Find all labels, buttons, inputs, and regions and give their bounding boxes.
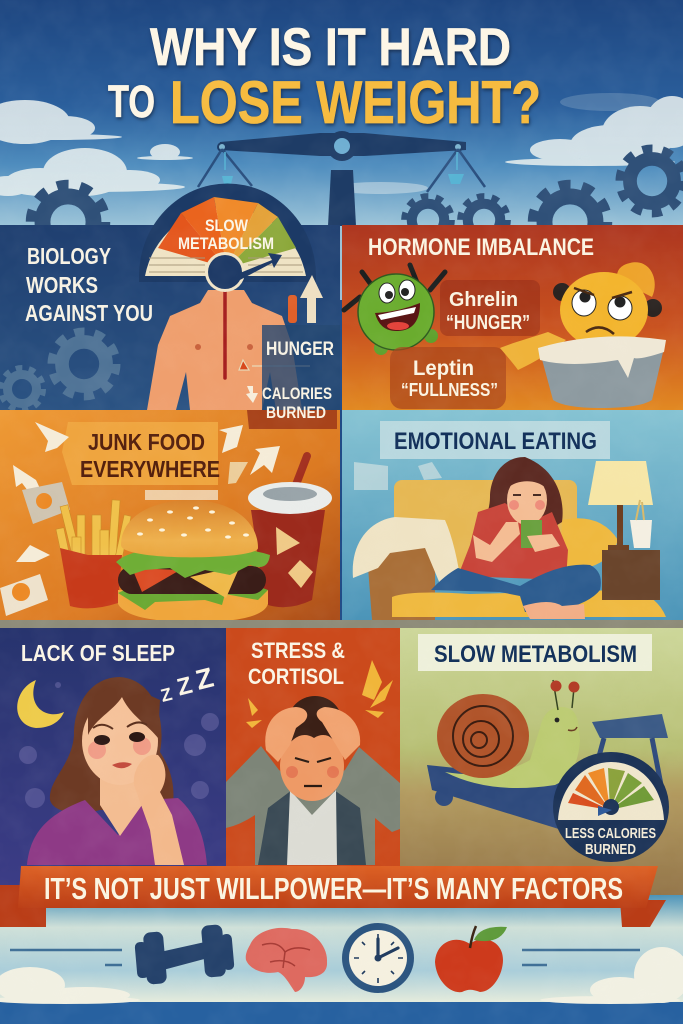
sky background xyxy=(0,0,683,300)
label: calories burned: BURNED xyxy=(266,403,326,422)
balance scale xyxy=(198,131,485,226)
label: emotional eating xyxy=(380,421,610,459)
illustration: lamp and side table xyxy=(588,461,660,600)
character: green ghrelin germ xyxy=(344,265,445,355)
icon: stress sparks xyxy=(246,660,393,728)
lower divider strip xyxy=(0,620,683,628)
label: emotional eating: EMOTIONAL EATING xyxy=(394,428,597,455)
decoration: wall notes xyxy=(354,462,442,490)
gauge: slow metabolism: METABOLISM xyxy=(178,234,274,253)
decoration: wrappers xyxy=(0,482,70,616)
heading: stress and cortisol: CORTISOL xyxy=(248,664,344,689)
label: junk food everywhere: EVERYWHERE xyxy=(80,456,220,482)
panel: emotional eating xyxy=(342,410,683,622)
gears behind the panels xyxy=(32,150,683,258)
panel: slow metabolism xyxy=(400,628,683,895)
panel: stress and cortisol xyxy=(226,628,425,868)
label: ghrelin hunger xyxy=(440,280,540,336)
character: stressed man xyxy=(226,696,425,865)
title: WHY IS IT HARD xyxy=(150,18,511,77)
character: yellow leptin blob in a bowl xyxy=(500,262,666,408)
icons: cream arrows xyxy=(13,422,280,562)
icon: crescent moon xyxy=(17,680,64,728)
gauge: less calories burned xyxy=(553,752,669,862)
gauge: less calories burned: BURNED xyxy=(585,841,636,858)
heading: stress and cortisol xyxy=(248,638,345,689)
label: hunger xyxy=(262,325,340,411)
icon: zzz: Z xyxy=(192,662,216,696)
label: hunger: HUNGER xyxy=(266,339,334,360)
icon: drink cup xyxy=(248,456,332,607)
icon: fries xyxy=(56,500,131,608)
icon: zzz: Z xyxy=(174,672,195,701)
heading: biology: BIOLOGY xyxy=(27,243,111,269)
label: junk food everywhere xyxy=(62,422,220,485)
arrows: hunger up xyxy=(288,275,323,323)
gauge: less calories burned: LESS CALORIES xyxy=(565,825,656,842)
icon: biology gears xyxy=(2,333,115,410)
label: calories burned xyxy=(246,384,337,429)
label: ghrelin hunger: Ghrelin xyxy=(449,289,518,311)
icon: zzz xyxy=(159,662,216,706)
heading: hormone imbalance: HORMONE IMBALANCE xyxy=(368,234,594,261)
character: snail xyxy=(437,680,580,788)
label: slow metabolism xyxy=(418,634,652,671)
heading: biology: WORKS xyxy=(26,272,98,298)
icon: brain xyxy=(246,928,327,992)
icon: burger xyxy=(116,500,270,622)
panel: lack of sleep xyxy=(0,628,226,888)
character: woman eating xyxy=(431,457,601,619)
label: slow metabolism: SLOW METABOLISM xyxy=(434,641,637,668)
label: leptin fullness xyxy=(390,347,506,409)
panel: junk food everywhere xyxy=(0,410,340,622)
label: calories burned: CALORIES xyxy=(262,384,332,403)
icon: dumbbell xyxy=(134,924,235,985)
banner xyxy=(0,866,666,927)
icon: apple xyxy=(435,926,507,992)
heading: lack of sleep: LACK OF SLEEP xyxy=(21,640,175,666)
heading: biology: AGAINST YOU xyxy=(25,300,153,326)
heading: stress and cortisol: STRESS & xyxy=(251,638,345,663)
title xyxy=(108,18,541,136)
panel: hormone imbalance xyxy=(342,225,683,411)
character: tired woman xyxy=(27,677,207,865)
label: leptin fullness: Leptin xyxy=(413,357,474,380)
label: ghrelin hunger: “HUNGER” xyxy=(446,312,530,334)
gauge: slow metabolism xyxy=(139,184,316,292)
figure: torso xyxy=(147,290,310,410)
decoration: night blots xyxy=(19,682,219,808)
title: TO xyxy=(108,76,155,127)
gauge: slow metabolism: SLOW xyxy=(205,216,249,235)
label: junk food everywhere: JUNK FOOD xyxy=(88,429,205,455)
icon: clock xyxy=(342,923,414,993)
label: leptin fullness: “FULLNESS” xyxy=(401,380,498,400)
icon: zzz: Z xyxy=(159,684,174,706)
panel: biology works against you xyxy=(0,184,340,411)
title: LOSE WEIGHT? xyxy=(170,69,541,136)
heading: biology xyxy=(25,243,153,326)
clouds xyxy=(0,93,683,216)
footer background xyxy=(0,895,683,1024)
illustration: sofa xyxy=(353,480,666,620)
footer clouds xyxy=(0,947,683,1004)
illustration: treadmill xyxy=(427,714,668,838)
